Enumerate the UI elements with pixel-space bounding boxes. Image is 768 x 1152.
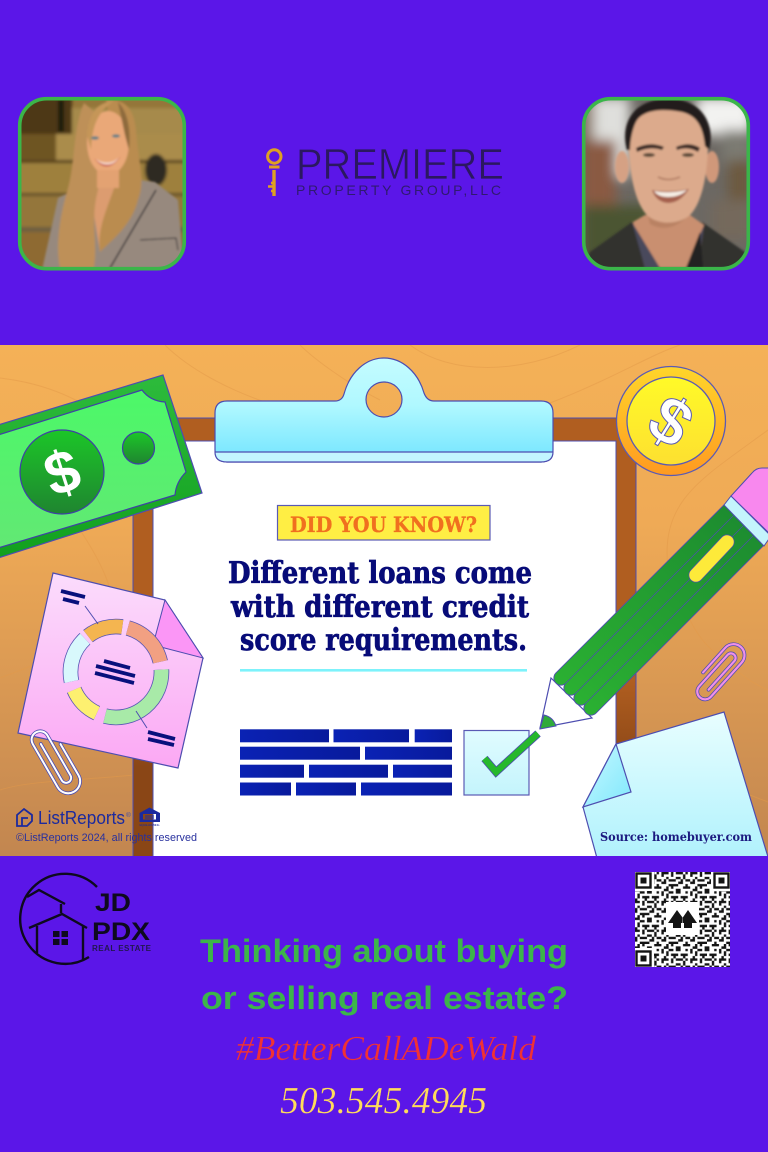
clipboard paper [153, 441, 616, 871]
icon: gold coin [616, 366, 726, 476]
clipboard board frame [133, 418, 636, 888]
icon: dollar bill: $ [36, 435, 88, 509]
call to action headline: or selling real estate? [201, 980, 568, 1016]
logo: ListReports [16, 807, 197, 844]
logo: Premiere Property Group [268, 140, 504, 198]
chart labels [61, 591, 175, 745]
logo: JD PDX Real Estate [20, 874, 152, 964]
panel: clipboard illustration [0, 345, 768, 888]
donut chart [70, 627, 161, 717]
icon: pink pie chart document [18, 573, 203, 768]
logo subline: PROPERTY GROUP,LLC [296, 182, 501, 198]
placeholder text bars [240, 729, 452, 796]
icon: equal housing [140, 808, 160, 822]
background contour lines [0, 345, 768, 802]
panel background [0, 345, 768, 856]
icon: white paperclip [30, 729, 82, 796]
call to action headline [200, 933, 568, 1016]
icon: gold coin: $ [636, 380, 706, 462]
logo wordmark: PREMIERE [296, 140, 504, 189]
callout: did you know: DID YOU KNOW? [290, 512, 477, 537]
source credit: Source: homebuyer.com [600, 830, 752, 844]
QR center icon [666, 902, 699, 935]
clipboard clip [215, 358, 553, 462]
phone number: 503.545.4945 [280, 1080, 487, 1122]
icon: dollar bill [0, 375, 202, 558]
icon: gold key [268, 150, 281, 196]
icon: green pencil [540, 468, 768, 729]
logo: ListReports: ® [126, 811, 131, 819]
logo: JD PDX Real Estate: JD [95, 889, 131, 917]
checkbox with check mark [464, 730, 538, 795]
hashtag: #BetterCallADeWald [236, 1029, 537, 1068]
photo: woman agent [18, 97, 186, 270]
icon: pink paperclip [695, 642, 746, 702]
call to action headline: Thinking about buying [200, 933, 568, 969]
logo: ListReports: ListReports [38, 807, 125, 828]
logo: ListReports: EQUAL HOUSING [140, 823, 160, 827]
heading: loan statement: Different loans come [228, 556, 532, 591]
logo: JD PDX Real Estate: PDX [92, 918, 150, 946]
photo: man agent [582, 97, 752, 270]
logo: ListReports: ©ListReports 2024, all rights reserved [16, 832, 197, 844]
heading: loan statement: score requirements. [240, 623, 527, 658]
QR code [635, 872, 730, 967]
QR finder patterns [635, 872, 730, 967]
icon: ListReports mark [17, 809, 32, 826]
heading: loan statement: with different credit [230, 590, 529, 625]
callout: did you know [278, 506, 490, 540]
icon: blue sticky note [582, 711, 768, 856]
logo: JD PDX Real Estate: REAL ESTATE [92, 944, 152, 953]
heading: loan statement [228, 556, 532, 658]
icon: house in circle [20, 874, 97, 964]
